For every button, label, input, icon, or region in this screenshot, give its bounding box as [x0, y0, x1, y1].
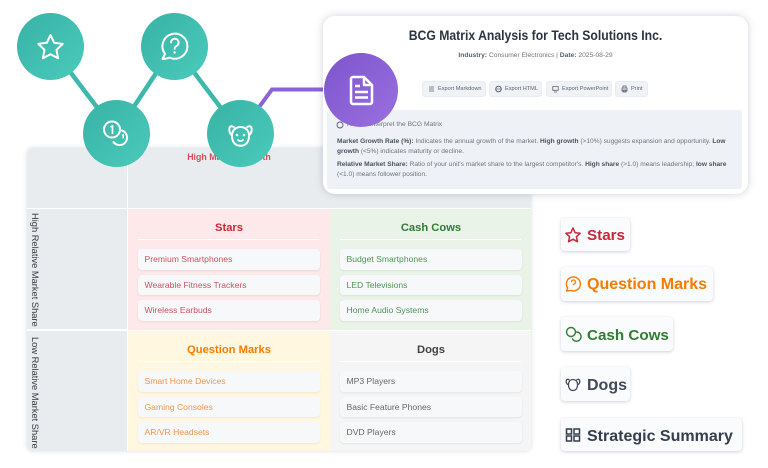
text: market growth rate	[337, 138, 726, 155]
legend tag: dogs: Dogs	[587, 377, 627, 394]
legend tag: strategic summary: Strategic Summary	[587, 428, 733, 445]
item: mp3 players: MP3 Players	[346, 376, 395, 386]
header cell: high market growth: High Market Growth	[187, 152, 271, 162]
item: home audio systems	[340, 300, 522, 320]
item: mp3 players	[340, 371, 522, 392]
item: ar/vr headsets: AR/VR Headsets	[144, 427, 209, 437]
heading: how to interpret: How to Interpret the BCG Matrix	[347, 121, 442, 128]
item: ar/vr headsets	[138, 422, 320, 442]
item: gaming consoles	[138, 396, 320, 417]
legend tag: question marks: Question Marks	[587, 276, 707, 293]
legend tag: strategic summary	[561, 418, 742, 451]
panel: how to interpret	[327, 110, 742, 189]
item: gaming consoles: Gaming Consoles	[144, 402, 213, 412]
legend tag: cash cows: Cash Cows	[587, 327, 669, 344]
icon: star node	[17, 13, 84, 80]
item: budget smartphones	[340, 249, 522, 270]
button: export markdown: Export Markdown	[438, 86, 482, 92]
text: relative market share: (<1.0) means follower position.	[337, 171, 427, 178]
item: dvd players: DVD Players	[346, 427, 396, 437]
title: BCG Matrix Analysis for Tech Solutions Inc.	[409, 28, 662, 44]
quadrant: dogs	[330, 331, 532, 452]
row label: low relative market share: Low Relative Market Share	[30, 337, 40, 449]
item: smart home devices: Smart Home Devices	[144, 376, 226, 386]
header cell: corner	[27, 148, 127, 208]
icon: coins node	[83, 100, 150, 167]
text: relative market share: Relative Market Share: Ratio of your unit's market share to the largest competitor's. High share (>1.0) means leadership; low share	[337, 161, 726, 168]
text: market growth rate: Market Growth Rate (%): Indicates the annual growth of the market. High growth (>10%) suggests expansion and opportunity. Low	[337, 138, 726, 145]
button: export powerpoint: Export PowerPoint	[562, 86, 608, 92]
row label: high relative market share	[27, 209, 127, 329]
quadrant: cash cows	[330, 209, 532, 330]
icon: info	[336, 122, 344, 128]
text: relative market share	[337, 161, 726, 178]
row label: low relative market share	[27, 331, 127, 451]
item: basic feature phones: Basic Feature Phones	[346, 402, 431, 412]
icon: document node	[324, 53, 398, 127]
legend tag: stars: Stars	[587, 227, 625, 244]
item: dvd players	[340, 422, 522, 442]
header cell: high market growth	[128, 148, 330, 208]
icon: question node	[141, 13, 208, 80]
item: wireless earbuds	[138, 300, 320, 320]
legend tag: stars	[561, 218, 630, 251]
item: premium smartphones: Premium Smartphones	[144, 254, 232, 264]
quadrant: stars	[128, 209, 330, 330]
legend tag: question marks	[561, 267, 713, 301]
heading: question marks: Question Marks	[187, 344, 271, 356]
panel: report header card	[323, 16, 748, 194]
item: budget smartphones: Budget Smartphones	[346, 254, 427, 264]
button: print: Print	[631, 86, 643, 92]
button: export html: Export HTML	[505, 86, 538, 92]
legend tag: dogs	[561, 367, 630, 401]
row label: high relative market share: High Relative Market Share	[30, 213, 40, 327]
panel: BCG matrix	[27, 148, 531, 451]
button: export html	[489, 81, 542, 97]
heading: stars: Stars	[215, 222, 243, 234]
subtitle: industry and date: Industry: Consumer Electronics | Date: 2025-08-29	[458, 52, 613, 59]
item: wireless earbuds: Wireless Earbuds	[144, 305, 212, 315]
item: premium smartphones	[138, 249, 320, 270]
button: export powerpoint	[546, 81, 612, 97]
connector lines	[69, 72, 323, 108]
item: led televisions: LED Televisions	[346, 280, 407, 290]
item: home audio systems: Home Audio Systems	[346, 305, 429, 315]
item: led televisions	[340, 274, 522, 295]
icon: dog node	[207, 100, 274, 167]
item: wearable fitness trackers	[138, 274, 320, 295]
legend tag: cash cows	[561, 317, 673, 351]
item: smart home devices	[138, 371, 320, 392]
item: basic feature phones	[340, 396, 522, 417]
text: market growth rate: growth (<5%) indicates maturity or decline.	[337, 148, 464, 155]
heading: dogs: Dogs	[417, 344, 445, 356]
item: wearable fitness trackers: Wearable Fitness Trackers	[144, 280, 247, 290]
button: export markdown	[422, 81, 486, 97]
header cell: low market growth	[330, 148, 531, 208]
heading: cash cows: Cash Cows	[401, 222, 461, 234]
quadrant: question marks	[128, 331, 330, 452]
button: print	[615, 81, 648, 97]
